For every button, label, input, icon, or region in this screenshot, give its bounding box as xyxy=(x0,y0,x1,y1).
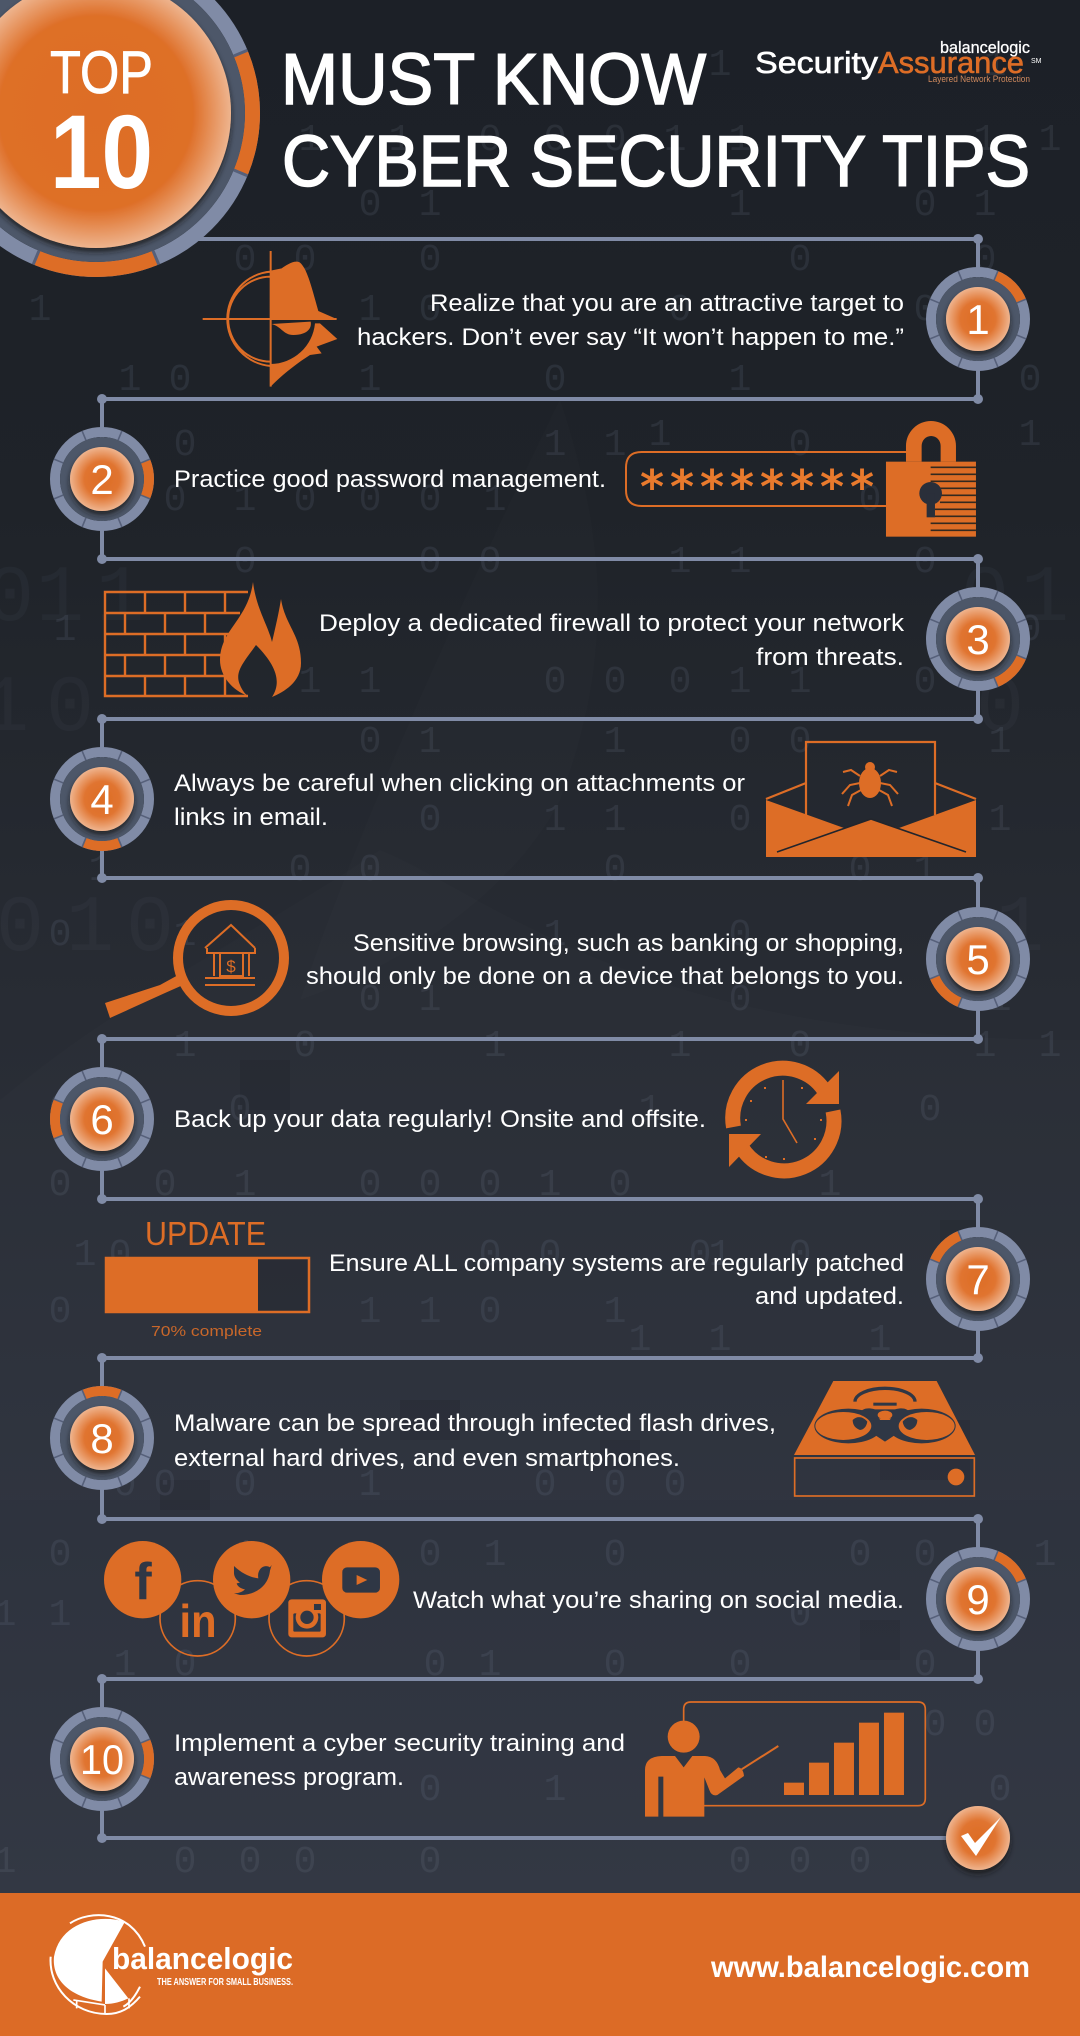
background: binary digits: 011001 xyxy=(359,721,1011,764)
number circle 6: 6 xyxy=(90,1096,114,1143)
icon: hacker crosshair xyxy=(203,251,337,387)
tip 10 xyxy=(54,1702,925,1817)
background: binary digits: 1001000 xyxy=(114,1644,936,1687)
number circle 4 xyxy=(54,751,150,847)
logo: security assurance: SM xyxy=(1031,58,1042,65)
number circle 2 xyxy=(54,431,150,527)
icon: social media circles: in xyxy=(180,1595,216,1647)
background: binary digits: 11000 xyxy=(29,289,936,332)
background: binary digits: 0101 xyxy=(359,979,1011,1022)
background: binary digits: 01010001 xyxy=(49,1534,1056,1577)
tip text 10: Implement a cyber security training and xyxy=(174,1730,625,1757)
background: binary digits: 11000110 xyxy=(299,661,936,704)
tip text 3: Deploy a dedicated firewall to protect your network xyxy=(319,610,905,637)
tip text 10: awareness program. xyxy=(174,1764,404,1791)
tip text 4: Always be careful when clicking on attachments or xyxy=(174,770,745,797)
tip text 1 xyxy=(357,290,904,351)
tip 1 xyxy=(203,251,1026,387)
background: binary digits: 000110 xyxy=(234,541,936,584)
tip text 3: from threats. xyxy=(756,644,904,671)
background: binary digits: 0110 xyxy=(174,424,811,467)
number circle 9: 9 xyxy=(966,1576,990,1623)
background: binary digits: 001000101 xyxy=(49,1164,841,1207)
background: binary digits: 010 xyxy=(419,1769,1011,1812)
background: binary digits: 0110 xyxy=(49,914,751,957)
icon: infected email xyxy=(766,742,976,857)
tip text 7 xyxy=(329,1250,904,1310)
tip 4 xyxy=(54,742,976,857)
number circle 9 xyxy=(930,1551,1026,1647)
tip text 1: Realize that you are an attractive target to xyxy=(430,290,904,317)
number circle 5 xyxy=(930,911,1026,1007)
tip text 9: Watch what you’re sharing on social media. xyxy=(413,1587,904,1614)
icon: biohazard hard drive xyxy=(794,1381,975,1496)
logo: security assurance: Layered Network Protection xyxy=(928,74,1030,84)
background: binary digits: 100001 xyxy=(89,849,936,892)
tip text 4: links in email. xyxy=(174,804,328,831)
tip text 4 xyxy=(174,770,745,831)
logo: security assurance xyxy=(755,38,1042,84)
icon: password field and padlock xyxy=(626,421,976,537)
number circle 10 xyxy=(54,1711,150,1807)
icon: trainer with bar chart xyxy=(645,1702,925,1817)
icon: update progress bar: UPDATE xyxy=(145,1215,266,1252)
tip 6 xyxy=(54,1068,839,1171)
background: binary digits: 00 xyxy=(924,1704,996,1747)
background: binary digits: 01101 xyxy=(49,1291,626,1334)
tip text 10 xyxy=(174,1730,625,1791)
icon: magnifier over bank: $ xyxy=(226,957,236,976)
tip 3 xyxy=(105,582,1026,697)
background: binary digits: 0001000 xyxy=(114,1464,686,1507)
background: binary digits: 11 xyxy=(649,414,1041,457)
icon: magnifier over bank xyxy=(105,905,284,1018)
background: binary digits: 11 xyxy=(709,44,1006,87)
tip text 1: hackers. Don’t ever say “It won’t happen to me.” xyxy=(357,324,904,351)
number circle 4: 4 xyxy=(90,776,114,823)
background: binary digits: 110 xyxy=(0,1594,811,1637)
tip 5 xyxy=(105,905,1026,1018)
icon: firewall xyxy=(105,582,301,697)
background: ghost shapes xyxy=(0,400,1080,1660)
icon: social media circles: f xyxy=(134,1553,152,1611)
tip text 8: Malware can be spread through infected flash drives, xyxy=(174,1410,776,1437)
logo: balancelogic: THE ANSWER FOR SMALL BUSINESS. xyxy=(157,1976,293,1988)
background: binary digits: 00000 xyxy=(234,239,996,282)
background: binary digits: 110001111 xyxy=(299,119,1061,162)
website url: www.balancelogic.com xyxy=(710,1951,1030,1984)
number circle 3 xyxy=(930,591,1026,687)
title: CYBER SECURITY TIPS xyxy=(282,122,1030,202)
number circle 3: 3 xyxy=(966,616,990,663)
tip text 5: Sensitive browsing, such as banking or shopping, xyxy=(353,930,904,957)
background: binary digits: 01101 xyxy=(419,799,1011,842)
background: binary digits: 0100010 xyxy=(164,479,881,522)
background: binary digits: 1011011 xyxy=(174,1025,1061,1068)
title xyxy=(281,40,1030,202)
number circle 10: 10 xyxy=(80,1736,124,1783)
logo: security assurance: Assurance xyxy=(878,45,1024,80)
tip text 8 xyxy=(174,1410,776,1472)
background: binary digits: 101010 xyxy=(119,359,1041,402)
number circle 5: 5 xyxy=(966,936,990,983)
tip text 6: Back up your data regularly! Onsite and offsite. xyxy=(174,1106,706,1133)
number circle 6 xyxy=(54,1071,150,1167)
tip 9 xyxy=(104,1541,1026,1656)
number circle 1: 1 xyxy=(966,296,990,343)
icon: update progress bar: 70% complete xyxy=(151,1323,262,1340)
tip 7 xyxy=(105,1215,1026,1340)
logo: security assurance: balancelogic xyxy=(940,38,1030,57)
tip text 8: external hard drives, and even smartphones. xyxy=(174,1445,680,1472)
badge: top 10: TOP xyxy=(50,39,153,106)
background: large faded digits: 100 xyxy=(0,664,1024,755)
background: binary digits: 0010 xyxy=(49,1089,941,1132)
tip 8 xyxy=(54,1381,975,1496)
number circle 2: 2 xyxy=(90,456,114,503)
background: binary digits: 10000000 xyxy=(0,1841,871,1884)
background: binary digits: 1000010 xyxy=(74,1234,811,1277)
badge: top 10: 10 xyxy=(50,94,153,211)
logo: security assurance: Security xyxy=(755,45,879,80)
logo: balancelogic xyxy=(51,1915,293,2014)
tip text 3 xyxy=(319,610,905,671)
footer xyxy=(0,1893,1080,2036)
tip text 5: should only be done on a device that belongs to you. xyxy=(306,963,904,990)
logo: balancelogic: balancelogic xyxy=(112,1941,293,1976)
badge: top 10 xyxy=(0,0,253,270)
icon: update progress bar xyxy=(105,1215,309,1340)
icon: backup clock xyxy=(729,1068,839,1171)
title: MUST KNOW xyxy=(281,40,706,120)
background: binary digits: 111 xyxy=(629,1319,891,1362)
tip text 7: and updated. xyxy=(755,1283,904,1310)
check mark xyxy=(946,1806,1010,1870)
background: large faded digits: 0101 xyxy=(0,884,1044,975)
number circle 8: 8 xyxy=(90,1415,114,1462)
background: large faded digits xyxy=(0,554,1069,975)
connector lines xyxy=(97,234,983,1843)
number circle 7: 7 xyxy=(966,1256,990,1303)
number circle 8 xyxy=(54,1390,150,1486)
background: large faded digits: 01101 xyxy=(0,554,1069,645)
background: binary digits: 10 xyxy=(54,609,1041,652)
password asterisks: ******** xyxy=(640,460,874,514)
tip text 5 xyxy=(306,930,904,990)
number circle 1 xyxy=(930,271,1026,367)
icon: social media circles xyxy=(104,1541,399,1656)
tip text 7: Ensure ALL company systems are regularly patched xyxy=(329,1250,904,1277)
background: binary digits: 01101 xyxy=(359,184,996,227)
tip text 2: Practice good password management. xyxy=(174,466,606,493)
number circle 7 xyxy=(930,1231,1026,1327)
tip 2 xyxy=(54,421,976,537)
